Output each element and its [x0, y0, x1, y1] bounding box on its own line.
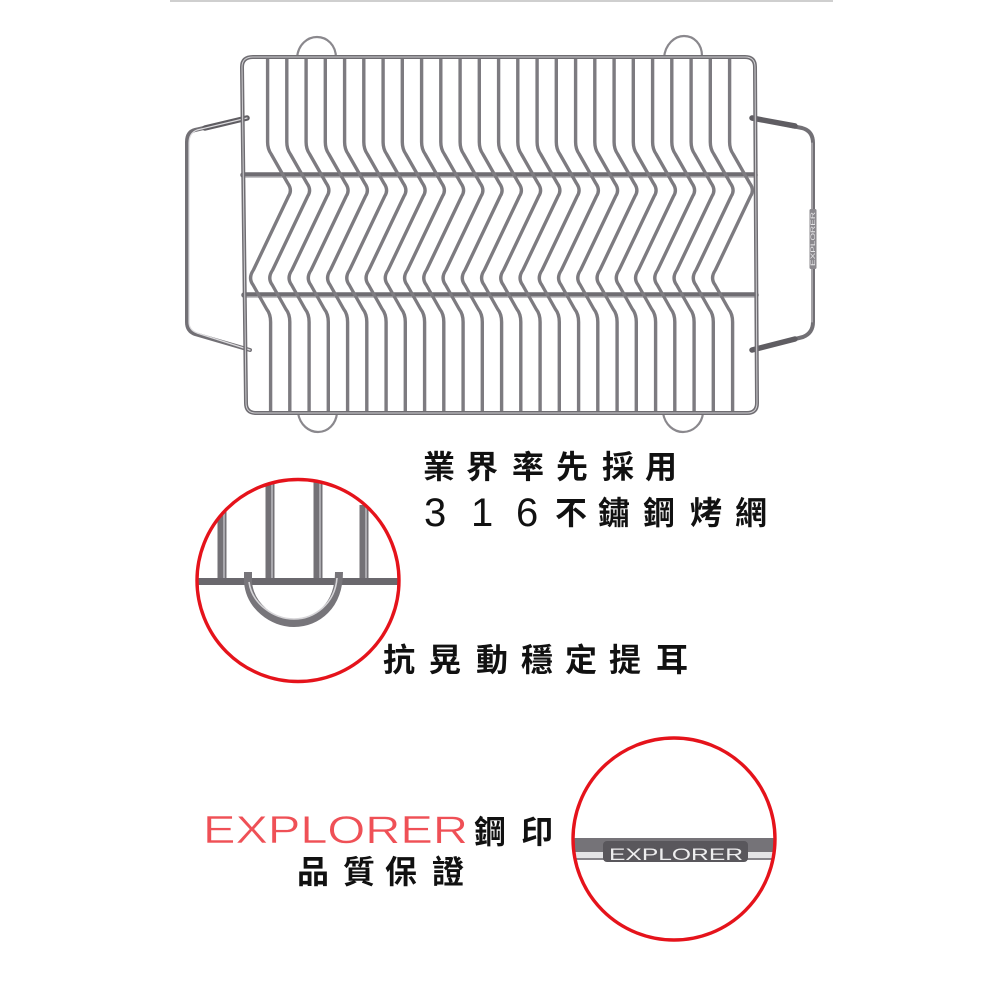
heading line 2: 不鏽鋼烤網: [555, 495, 767, 531]
red ring: [197, 480, 399, 682]
icon: top and bottom lifting hooks: [297, 36, 703, 432]
EXPLORER stamp caption: [203, 809, 553, 890]
top divider line: [170, 0, 833, 2]
red ring: [573, 738, 775, 940]
heading: industry first 316 stainless grill: [423, 449, 767, 535]
product photo: wire grill: [187, 36, 817, 432]
steel stamp on handle: [810, 209, 817, 269]
number 316: 316: [424, 491, 538, 535]
detail circle: EXPLORER stamp: [572, 738, 776, 940]
detail photo: stamped bar: EXPLORER: [609, 845, 743, 864]
heading line 1: 業界率先採用: [423, 449, 677, 485]
icon: right handle: [752, 118, 813, 350]
steel stamp on handle: EXPLORER: [810, 212, 817, 266]
red brand name: EXPLORER: [203, 809, 468, 852]
caption: anti-sway stable ears: 抗晃動穩定提耳: [383, 642, 688, 678]
detail circle: lifting ear: [196, 480, 400, 682]
label: steel stamp: 鋼印: [474, 814, 553, 850]
label: quality guarantee: 品質保證: [297, 854, 464, 890]
cross bars: [243, 175, 756, 297]
icon: left handle: [187, 118, 250, 350]
detail photo: wire and hook: [196, 480, 400, 623]
outer frame: [242, 57, 757, 413]
detail photo: stamped bar: [572, 838, 776, 864]
zigzag wires: [250, 57, 753, 413]
